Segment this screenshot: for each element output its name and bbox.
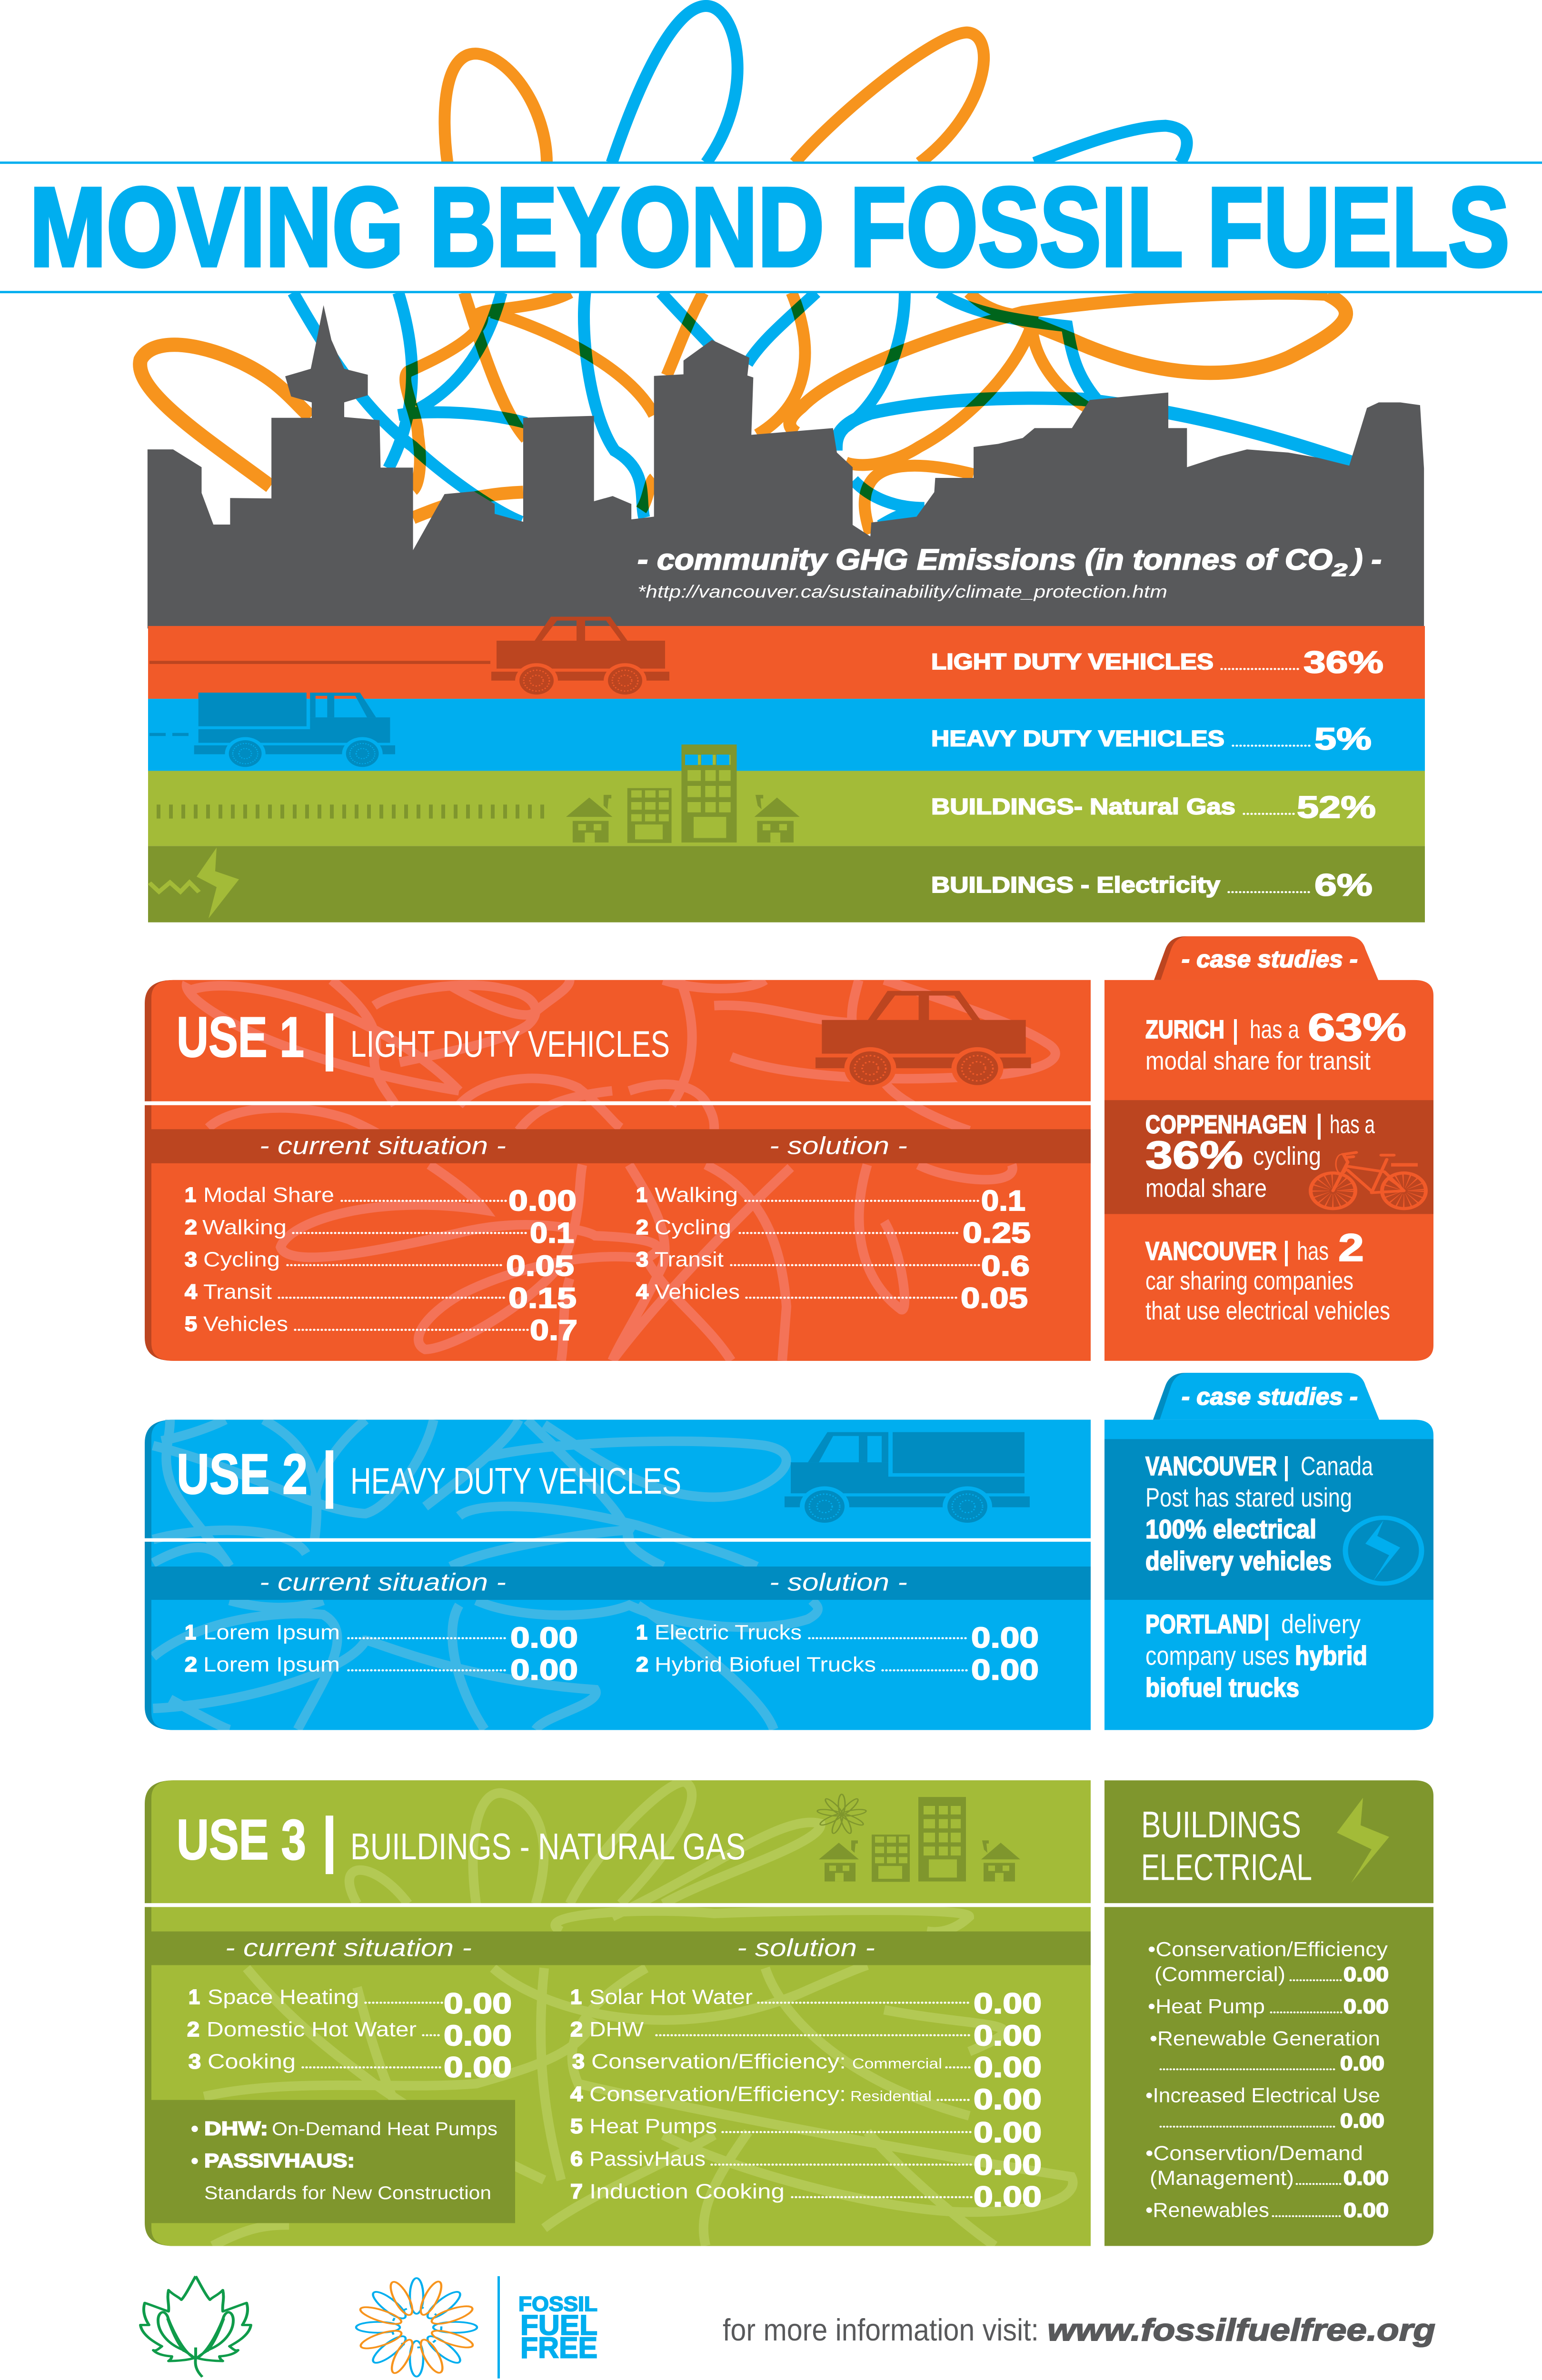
callout: dhw and passivhaus: • (191, 2151, 198, 2172)
footer link text (723, 2313, 1435, 2347)
list: solution: 0.00 (974, 2084, 1042, 2116)
band label: heavy duty: HEAVY DUTY VEHICLES (931, 726, 1224, 751)
list: solution: 0.00 (974, 1988, 1042, 2020)
list: current situation: 1 (185, 1621, 196, 1644)
band label: natural gas: BUILDINGS- Natural Gas (931, 794, 1235, 819)
list: electrical measures: (Management) (1150, 2167, 1294, 2190)
list: current situation: 0.00 (444, 1988, 512, 2020)
banner labels: - current situation - (259, 1132, 506, 1160)
list: current situation: 0.05 (506, 1250, 574, 1282)
callout: dhw and passivhaus: PASSIVHAUS: (204, 2150, 355, 2172)
emissions heading: 2 (1332, 560, 1347, 580)
logo wordmark: fossil fuel free: FOSSIL (518, 2292, 597, 2316)
list: solution: 0.05 (961, 1282, 1028, 1314)
list: solution: Induction Cooking (589, 2180, 785, 2203)
icon: car (816, 991, 1031, 1089)
list: solution: 0.00 (974, 2149, 1042, 2181)
icon: buildings and sun (817, 1795, 1020, 1882)
case: portland: PORTLAND (1145, 1610, 1263, 1639)
list: solution: Commercial (852, 2056, 942, 2072)
emissions heading: ) - (1349, 544, 1382, 576)
list: solution: 0.00 (974, 2020, 1042, 2052)
list: electrical measures: 0.00 (1340, 2110, 1384, 2132)
list: solution: Vehicles (655, 1280, 740, 1303)
list: solution: 2 (636, 1653, 648, 1676)
case: coppenhagen (1145, 1110, 1375, 1202)
case: vancouver: 100% electrical (1145, 1515, 1316, 1544)
list: current situation: 4 (185, 1280, 198, 1303)
logo wordmark: fossil fuel free (497, 2276, 597, 2379)
tab: case studies (1153, 1373, 1379, 1420)
source note: *http://vancouver.ca/sustainability/climate_protection.htm (637, 582, 1167, 602)
case: vancouver (1145, 1452, 1373, 1576)
list: current situation: Space Heating (208, 1985, 359, 2009)
banner labels: - current situation - (259, 1568, 506, 1596)
list: current situation: Transit (203, 1280, 272, 1303)
list: electrical measures: 0.00 (1343, 2167, 1389, 2190)
list: electrical measures: •Renewable Generation (1150, 2027, 1380, 2050)
list: electrical measures: •Renewables (1145, 2199, 1269, 2221)
list: current situation: 3 (185, 1248, 197, 1271)
panel: buildings electrical (1104, 1780, 1433, 2246)
list: solution: 4 (636, 1280, 649, 1303)
list: current situation: Lorem Ipsum (203, 1653, 340, 1676)
case: zurich (1145, 1006, 1406, 1075)
list: solution: 2 (570, 2018, 583, 2041)
hero flower loops (140, 6, 1352, 534)
icon: lightning band (149, 848, 239, 919)
callout: dhw and passivhaus: • (191, 2119, 198, 2140)
band label: electricity: BUILDINGS - Electricity (931, 873, 1221, 898)
list: solution: 0.00 (971, 1622, 1039, 1654)
list: current situation: 2 (185, 1653, 197, 1676)
case: zurich: has a (1250, 1015, 1299, 1044)
list: current situation: Walking (202, 1215, 287, 1239)
list: solution: Solar Hot Water (589, 1985, 753, 2009)
band label: light duty: LIGHT DUTY VEHICLES (931, 649, 1214, 674)
list: electrical measures: •Increased Electrical Use (1145, 2084, 1380, 2107)
band label: natural gas: 52% (1297, 790, 1376, 824)
callout: dhw and passivhaus: DHW: (204, 2118, 268, 2140)
tab: case studies (1154, 936, 1378, 980)
case: vancouver: delivery vehicles (1145, 1547, 1332, 1576)
emissions bands (148, 617, 1425, 922)
list: solution: 0.00 (971, 1654, 1039, 1686)
list: solution: Transit (655, 1248, 724, 1271)
heading: use 2 (177, 1443, 681, 1509)
banner labels (225, 1934, 875, 1962)
case: vancouver: car sharing companies (1145, 1267, 1353, 1295)
case: vancouver: VANCOUVER (1145, 1237, 1277, 1265)
list: current situation: 0.00 (444, 2052, 512, 2083)
list: current situation: 1 (185, 1183, 196, 1207)
list: current situation: 5 (185, 1312, 197, 1336)
list: solution: Hybrid Biofuel Trucks (655, 1653, 876, 1676)
band label: natural gas (931, 790, 1376, 824)
list: current situation: Cycling (203, 1248, 280, 1271)
icon: bicycle (1311, 1152, 1426, 1209)
case: vancouver (1145, 1226, 1390, 1325)
case: portland (1145, 1610, 1367, 1703)
panel: use 3 buildings natural gas (145, 1780, 1091, 2246)
heading: use 2: HEAVY DUTY VEHICLES (350, 1460, 681, 1502)
list: current situation: 0.00 (510, 1654, 578, 1686)
list: solution (636, 1621, 1039, 1686)
icon: electric circle (1345, 1517, 1422, 1584)
list: solution: 7 (570, 2180, 583, 2203)
heading: use 1: USE 1 (177, 1006, 304, 1069)
case: vancouver: Post has stared using (1145, 1483, 1352, 1512)
case: coppenhagen: modal share (1145, 1174, 1267, 1202)
case: portland: delivery (1281, 1610, 1361, 1639)
case: vancouver: that use electrical vehicles (1145, 1297, 1390, 1325)
callout: dhw and passivhaus: Standards for New Construction (204, 2182, 491, 2203)
case: vancouver: Canada (1301, 1452, 1373, 1481)
list: solution: 0.00 (974, 2181, 1042, 2213)
list: electrical measures: 0.00 (1343, 2199, 1389, 2221)
band label: light duty (931, 645, 1383, 680)
band label: light duty: 36% (1303, 645, 1383, 680)
list: solution: Electric Trucks (655, 1621, 802, 1644)
list: electrical measures: •Conservtion/Demand (1145, 2142, 1363, 2165)
list: solution: Heat Pumps (589, 2114, 717, 2138)
city skyline (148, 305, 1424, 628)
footer link text: for more information visit: (723, 2313, 1039, 2347)
list: electrical measures: 0.00 (1343, 1995, 1389, 2018)
panel: use 2 case studies (1104, 1373, 1433, 1730)
list: solution (636, 1183, 1031, 1314)
list: current situation: Vehicles (203, 1312, 288, 1336)
list: solution: 0.1 (981, 1185, 1025, 1217)
list: solution: Cycling (655, 1215, 731, 1239)
list: electrical measures (1145, 1938, 1389, 2221)
logo wordmark: fossil fuel free: FUEL (520, 2310, 597, 2341)
banner labels: - current situation - (225, 1934, 472, 1962)
banner labels: - solution - (769, 1568, 907, 1596)
heading: use 2: USE 2 (177, 1443, 308, 1506)
case: zurich: 63% (1308, 1006, 1406, 1049)
footer link text: www.fossilfuelfree.org (1047, 2313, 1435, 2347)
list: solution: PassivHaus (589, 2147, 706, 2171)
list: current situation: 2 (185, 1215, 197, 1239)
callout: dhw and passivhaus (151, 2100, 515, 2223)
list: solution: 1 (636, 1621, 647, 1644)
list: solution: 0.6 (981, 1250, 1030, 1282)
list: solution: 0.25 (963, 1217, 1031, 1249)
list: current situation: 2 (187, 2018, 199, 2041)
case: coppenhagen: 36% (1145, 1133, 1243, 1177)
case: portland: company uses (1145, 1642, 1289, 1671)
logo: green leaf (140, 2276, 251, 2377)
list: solution (570, 1985, 1042, 2213)
list: electrical measures: (Commercial) (1154, 1963, 1285, 1986)
banner labels (259, 1132, 907, 1160)
list: solution: 3 (572, 2050, 585, 2073)
tab: case studies: - case studies - (1182, 946, 1358, 972)
banner labels (259, 1568, 907, 1596)
icon: truck band (149, 693, 395, 770)
case: coppenhagen: COPPENHAGEN (1145, 1110, 1307, 1139)
list: current situation (187, 1985, 512, 2083)
heading: use 3: BUILDINGS - NATURAL GAS (350, 1826, 746, 1867)
list: current situation (185, 1621, 578, 1686)
icon: buildings band (157, 744, 800, 843)
list: current situation: 1 (189, 1985, 200, 2009)
case: zurich: ZURICH (1145, 1015, 1224, 1044)
list: current situation: 0.00 (444, 2020, 512, 2052)
logo: fossil fuel free flower (356, 2278, 477, 2377)
banner labels: - solution - (769, 1132, 907, 1160)
case: vancouver: VANCOUVER (1145, 1452, 1277, 1481)
case: coppenhagen: cycling (1253, 1142, 1321, 1170)
list: solution: Conservation/Efficiency: (591, 2050, 846, 2073)
case: portland: biofuel trucks (1145, 1673, 1299, 1703)
list: current situation: 0.15 (508, 1282, 577, 1314)
list: solution: DHW (589, 2018, 644, 2041)
panel: use 1 light duty vehicles (145, 980, 1091, 1361)
heading: buildings electrical: ELECTRICAL (1141, 1846, 1312, 1888)
band label: heavy duty (931, 722, 1372, 756)
list: solution: 2 (636, 1215, 648, 1239)
list: current situation: 0.00 (508, 1185, 577, 1217)
list: current situation: Modal Share (203, 1183, 334, 1207)
icon: lightning bolt (1337, 1798, 1389, 1883)
band label: electricity (931, 868, 1373, 902)
tab: case studies: - case studies - (1182, 1383, 1358, 1410)
case: portland: hybrid (1295, 1642, 1367, 1671)
case: vancouver: has (1297, 1237, 1329, 1265)
panel: use 2 heavy duty vehicles (145, 1420, 1091, 1730)
banner labels: - solution - (737, 1934, 875, 1962)
heading: buildings electrical: BUILDINGS (1141, 1804, 1301, 1845)
list: solution: 1 (636, 1183, 647, 1207)
list: electrical measures: 0.00 (1343, 1963, 1389, 1986)
case: coppenhagen: has a (1330, 1110, 1375, 1139)
list: current situation: 0.7 (530, 1314, 577, 1346)
logo wordmark: fossil fuel free: FREE (520, 2331, 597, 2364)
list: electrical measures: 0.00 (1340, 2052, 1384, 2075)
list: electrical measures: •Conservation/Efficiency (1148, 1938, 1388, 1961)
heading: use 1: LIGHT DUTY VEHICLES (350, 1023, 670, 1065)
case: vancouver: 2 (1338, 1226, 1364, 1269)
list: current situation: 3 (189, 2050, 201, 2073)
list: solution: Conservation/Efficiency: (589, 2082, 846, 2106)
heading: use 3: USE 3 (177, 1808, 306, 1872)
heading: use 1 (177, 1006, 670, 1071)
case: zurich: modal share for transit (1145, 1047, 1371, 1075)
icon: car band (149, 617, 669, 698)
list: solution: 0.00 (974, 2052, 1042, 2083)
icon: truck (785, 1432, 1030, 1527)
list: solution: 6 (570, 2147, 583, 2171)
list: current situation: 0.00 (510, 1622, 578, 1654)
heading: use 3 (177, 1808, 746, 1874)
list: solution: 4 (570, 2082, 583, 2106)
list: electrical measures: •Heat Pump (1148, 1995, 1265, 2018)
emissions heading: - community GHG Emissions (in tonnes of CO (637, 544, 1333, 576)
list: solution: Walking (655, 1183, 738, 1207)
list: solution: 0.00 (974, 2117, 1042, 2149)
heading: buildings electrical (1141, 1804, 1312, 1888)
band label: heavy duty: 5% (1314, 722, 1372, 756)
list: current situation: Domestic Hot Water (207, 2018, 417, 2041)
list: current situation: Lorem Ipsum (203, 1621, 340, 1644)
list: solution: 1 (570, 1985, 582, 2009)
band label: electricity: 6% (1314, 868, 1373, 902)
callout: dhw and passivhaus: On-Demand Heat Pumps (272, 2119, 497, 2140)
list: current situation (185, 1183, 577, 1346)
list: solution: 3 (636, 1248, 648, 1271)
list: current situation: 0.1 (530, 1217, 574, 1249)
list: solution: Residential (850, 2088, 932, 2104)
list: current situation: Cooking (208, 2050, 296, 2073)
list: solution: 5 (570, 2114, 583, 2138)
panel: use 1 case studies (1104, 936, 1433, 1361)
